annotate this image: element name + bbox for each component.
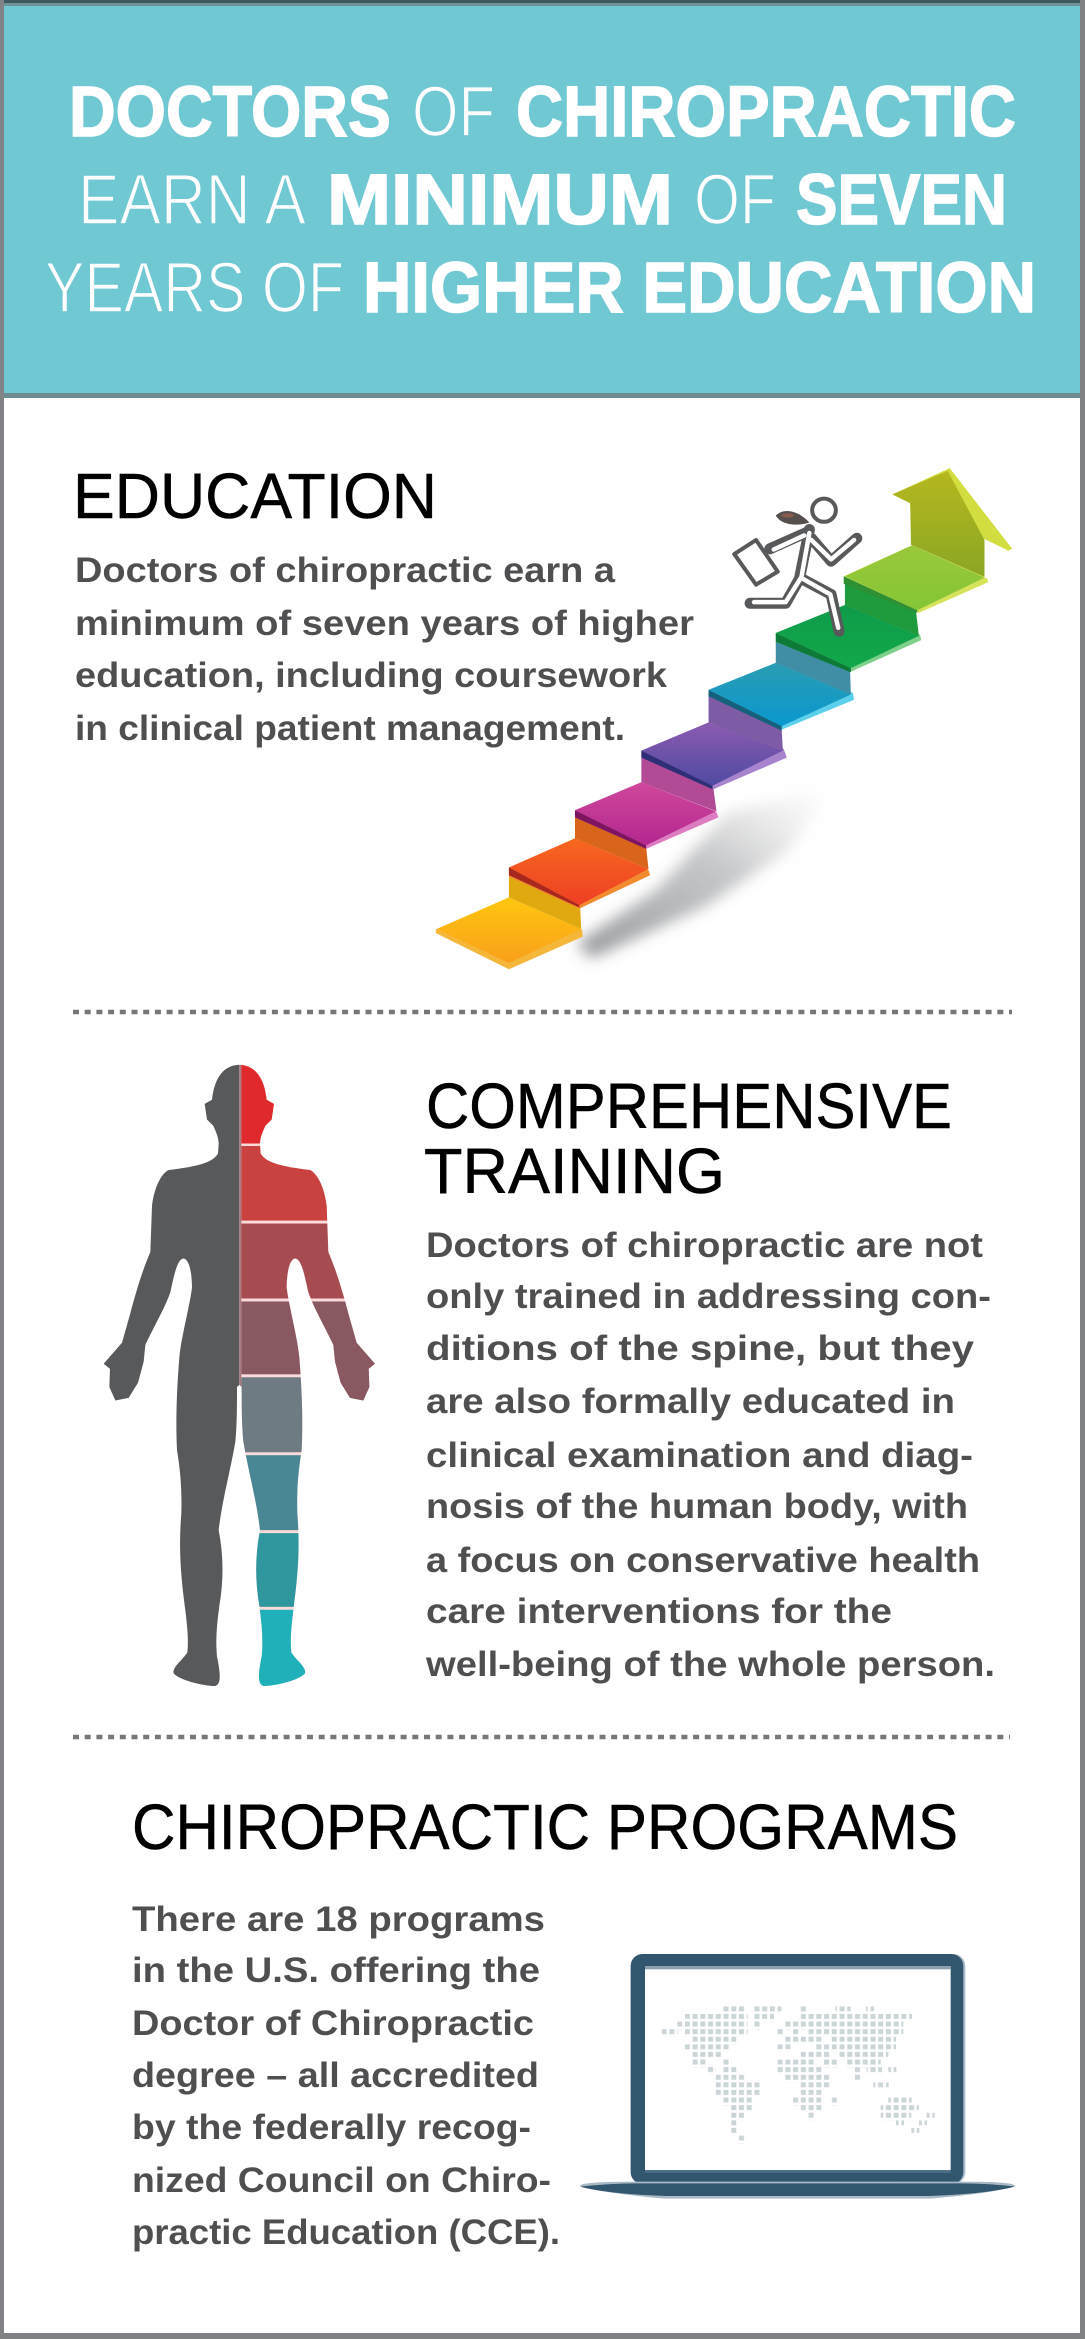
icon: laptop with world map [580, 1954, 1015, 2199]
text block: chiropractic programs: degree – all accredited [132, 2056, 539, 2095]
text block: comprehensive training: only trained in addressing con- [426, 1277, 991, 1316]
header banner [0, 0, 1085, 398]
text block: comprehensive training: nosis of the human body, with [426, 1487, 968, 1526]
title: SEVEN [796, 161, 1007, 240]
text block: education [75, 551, 694, 748]
icon: running businessman [734, 499, 857, 631]
title [45, 73, 1036, 328]
text block: education: Doctors of chiropractic earn a [75, 551, 616, 590]
body left half grey [104, 1065, 239, 1686]
text block: comprehensive training: ditions of the spine, but they [426, 1329, 975, 1368]
text block: chiropractic programs [132, 1900, 560, 2252]
title: MINIMUM [327, 161, 673, 240]
text block: chiropractic programs: nized Council on Chiro- [132, 2161, 551, 2200]
panel: chiropractic programs [132, 1791, 1015, 2252]
text block: comprehensive training: Doctors of chiropractic are not [426, 1226, 983, 1265]
text block: comprehensive training: clinical examination and diag- [426, 1436, 973, 1475]
divider [73, 1010, 1012, 1014]
title: OF [694, 161, 776, 240]
title: EARN A [78, 161, 307, 240]
panel: education [73, 460, 1012, 969]
body right half coloured bands [239, 1063, 380, 1690]
heading: comprehensive training: TRAINING [424, 1135, 725, 1207]
world map dots [662, 2006, 935, 2143]
text block: chiropractic programs: There are 18 programs [132, 1900, 545, 1939]
text block: chiropractic programs: practic Education (CCE). [132, 2213, 560, 2252]
icon: human body figure [104, 1063, 380, 1690]
title: YEARS OF [45, 249, 344, 328]
text block: comprehensive training [425, 1226, 995, 1684]
text block: chiropractic programs: by the federally recog- [132, 2108, 531, 2147]
text block: education: education, including coursework [75, 656, 668, 695]
heading: education: EDUCATION [73, 460, 437, 532]
title: DOCTORS [69, 73, 391, 152]
text block: chiropractic programs: in the U.S. offering the [132, 1951, 540, 1990]
text block: comprehensive training: a focus on conservative health [426, 1541, 980, 1580]
panel: comprehensive training [104, 1063, 995, 1690]
heading: chiropractic programs: CHIROPRACTIC PROGRAMS [132, 1791, 958, 1863]
text block: education: minimum of seven years of higher [75, 604, 694, 643]
text block: comprehensive training: are also formally educated in [426, 1382, 955, 1421]
heading: comprehensive training: COMPREHENSIVE [426, 1070, 952, 1142]
title: CHIROPRACTIC [516, 73, 1016, 152]
text block: chiropractic programs: Doctor of Chiropractic [132, 2004, 534, 2043]
divider [73, 1735, 1010, 1739]
title: HIGHER EDUCATION [363, 249, 1036, 328]
text block: education: in clinical patient management. [75, 709, 625, 748]
title: OF [412, 73, 495, 152]
text block: comprehensive training: care interventions for the [426, 1592, 892, 1631]
text block: comprehensive training: well-being of the whole person. [425, 1645, 995, 1684]
icon: rainbow staircase with arrow [436, 468, 1012, 969]
heading: comprehensive training [424, 1070, 952, 1207]
